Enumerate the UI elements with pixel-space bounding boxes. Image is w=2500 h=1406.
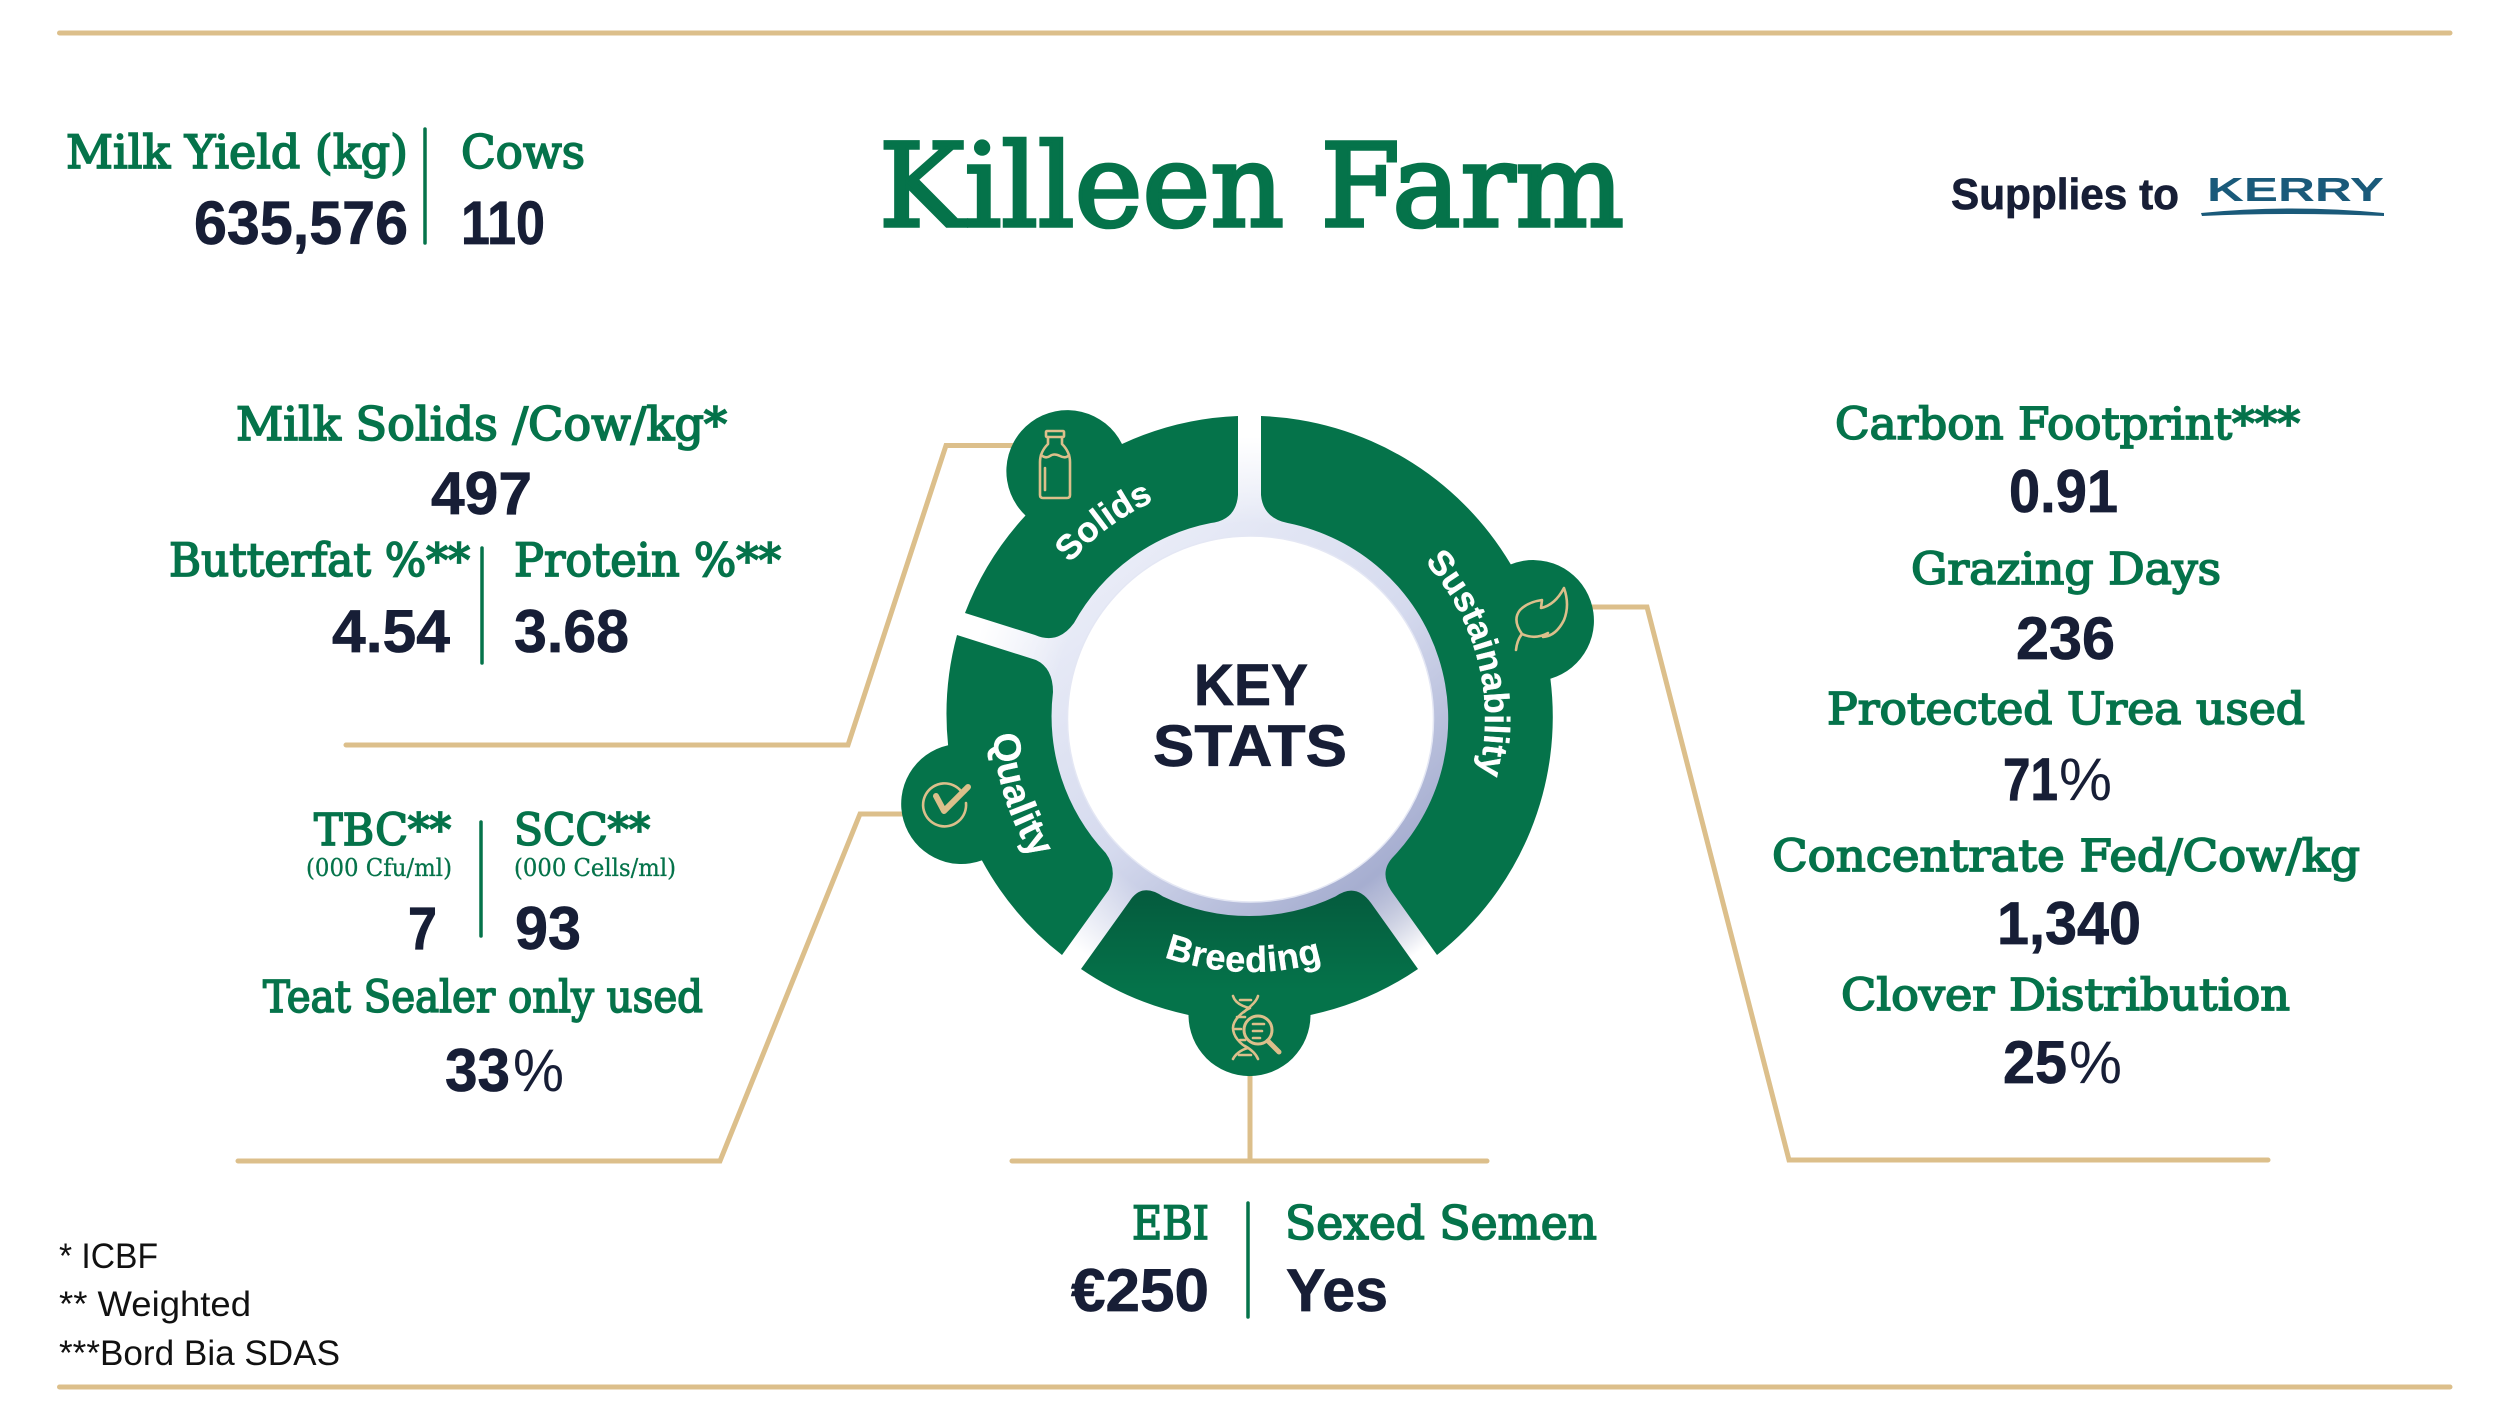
stat block: sustainability: 71 <box>2003 746 2058 813</box>
stat block: quality: 7 <box>408 895 437 962</box>
stat block: quality: 93 <box>515 895 581 962</box>
stat block: quality: SCC** <box>514 805 650 856</box>
segment: solids <box>965 410 1238 638</box>
stat block: quality: Teat Sealer only used <box>263 972 703 1023</box>
stat block: breeding: Yes <box>1286 1257 1388 1324</box>
stat block: sustainability <box>1772 399 2360 1096</box>
top rule <box>60 30 2450 36</box>
stat block: breeding: Sexed Semen <box>1285 1196 1597 1250</box>
stat block: solids: 3.68 <box>514 598 629 665</box>
title: Killeen Farm <box>879 120 1624 254</box>
stat block: sustainability: Carbon Footprint*** <box>1835 399 2300 450</box>
fade to white in the gaps <box>938 410 1562 1034</box>
segment: sustainability <box>1261 416 1594 955</box>
connector: sustainability <box>1575 607 2268 1160</box>
stat block: sustainability: Protected Urea used <box>1827 684 2305 735</box>
label: solids: Solids <box>1056 487 1151 560</box>
segment: quality <box>901 635 1113 955</box>
footnotes <box>59 1237 340 1373</box>
stat block: sustainability: 236 <box>2016 605 2115 672</box>
stat block: solids: 4.54 <box>332 598 451 665</box>
stat block: quality <box>263 805 703 1104</box>
footnotes: * ICBF <box>59 1237 158 1276</box>
icon: leaf <box>1516 588 1567 650</box>
footnotes: ***Bord Bia SDAS <box>59 1334 340 1373</box>
stat block: solids: Protein %** <box>514 533 781 587</box>
stat block: sustainability: % <box>2059 746 2112 813</box>
shaded disc <box>950 422 1550 1022</box>
supplies to Kerry logo: KERRY <box>2207 171 2384 208</box>
stat block: sustainability: Clover Distribution <box>1841 970 2290 1021</box>
supplies to Kerry logo <box>1951 170 2384 219</box>
center label: KEY <box>1194 653 1308 718</box>
key stats wheel <box>901 410 1594 1076</box>
stat block: quality: % <box>513 1037 564 1104</box>
icon: milk bottle <box>1040 431 1070 498</box>
stat block: sustainability: Grazing Days <box>1911 544 2221 595</box>
icon: check mark <box>923 783 968 826</box>
connector: solids <box>346 446 1030 745</box>
supplies to Kerry logo: Supplies to <box>1951 170 2179 219</box>
center circle <box>1068 536 1434 902</box>
stat block: breeding: €250 <box>1071 1257 1209 1324</box>
label: breeding: Breeding <box>1166 934 1320 972</box>
stat block: quality: TBC** <box>314 805 451 856</box>
stat: milk yield and cows: 110 <box>461 189 545 257</box>
icon: dna and magnifier <box>1233 996 1279 1059</box>
stat block: solids: Milk Solids /Cow/kg* <box>236 397 727 451</box>
stat block: sustainability: 0.91 <box>2009 458 2118 525</box>
connector: quality <box>238 814 925 1161</box>
stat block: quality: 33 <box>445 1037 510 1104</box>
stat block: breeding: EBI <box>1132 1196 1209 1250</box>
bottom rule <box>60 1384 2450 1390</box>
connector: breeding <box>1012 1060 1487 1161</box>
stat block: sustainability: 25 <box>2003 1029 2067 1096</box>
stat block: quality: (000 Cfu/ml) <box>306 854 452 882</box>
stat block: solids: 497 <box>431 460 532 527</box>
stat block: breeding <box>1071 1196 1597 1324</box>
center label <box>1153 653 1347 779</box>
stat block: sustainability: 1,340 <box>1997 890 2141 957</box>
center label: STATS <box>1153 714 1347 779</box>
label: quality: Quality <box>988 734 1051 853</box>
stat: milk yield and cows: 635,576 <box>194 189 408 257</box>
stat: milk yield and cows: Milk Yield (kg) <box>66 125 408 179</box>
footnotes: ** Weighted <box>59 1285 251 1324</box>
segment: breeding <box>1081 890 1418 1076</box>
stat block: solids <box>169 397 781 665</box>
stat block: sustainability: % <box>2069 1029 2122 1096</box>
stat block: solids: Butterfat %** <box>169 533 470 587</box>
label: sustainability: Sustainability <box>1428 550 1511 778</box>
stat block: quality: (000 Cells/ml) <box>514 854 676 882</box>
stat block: sustainability: Concentrate Fed/Cow/kg <box>1772 831 2360 882</box>
stat: milk yield and cows: Cows <box>461 125 585 179</box>
stat: milk yield and cows <box>66 125 585 257</box>
